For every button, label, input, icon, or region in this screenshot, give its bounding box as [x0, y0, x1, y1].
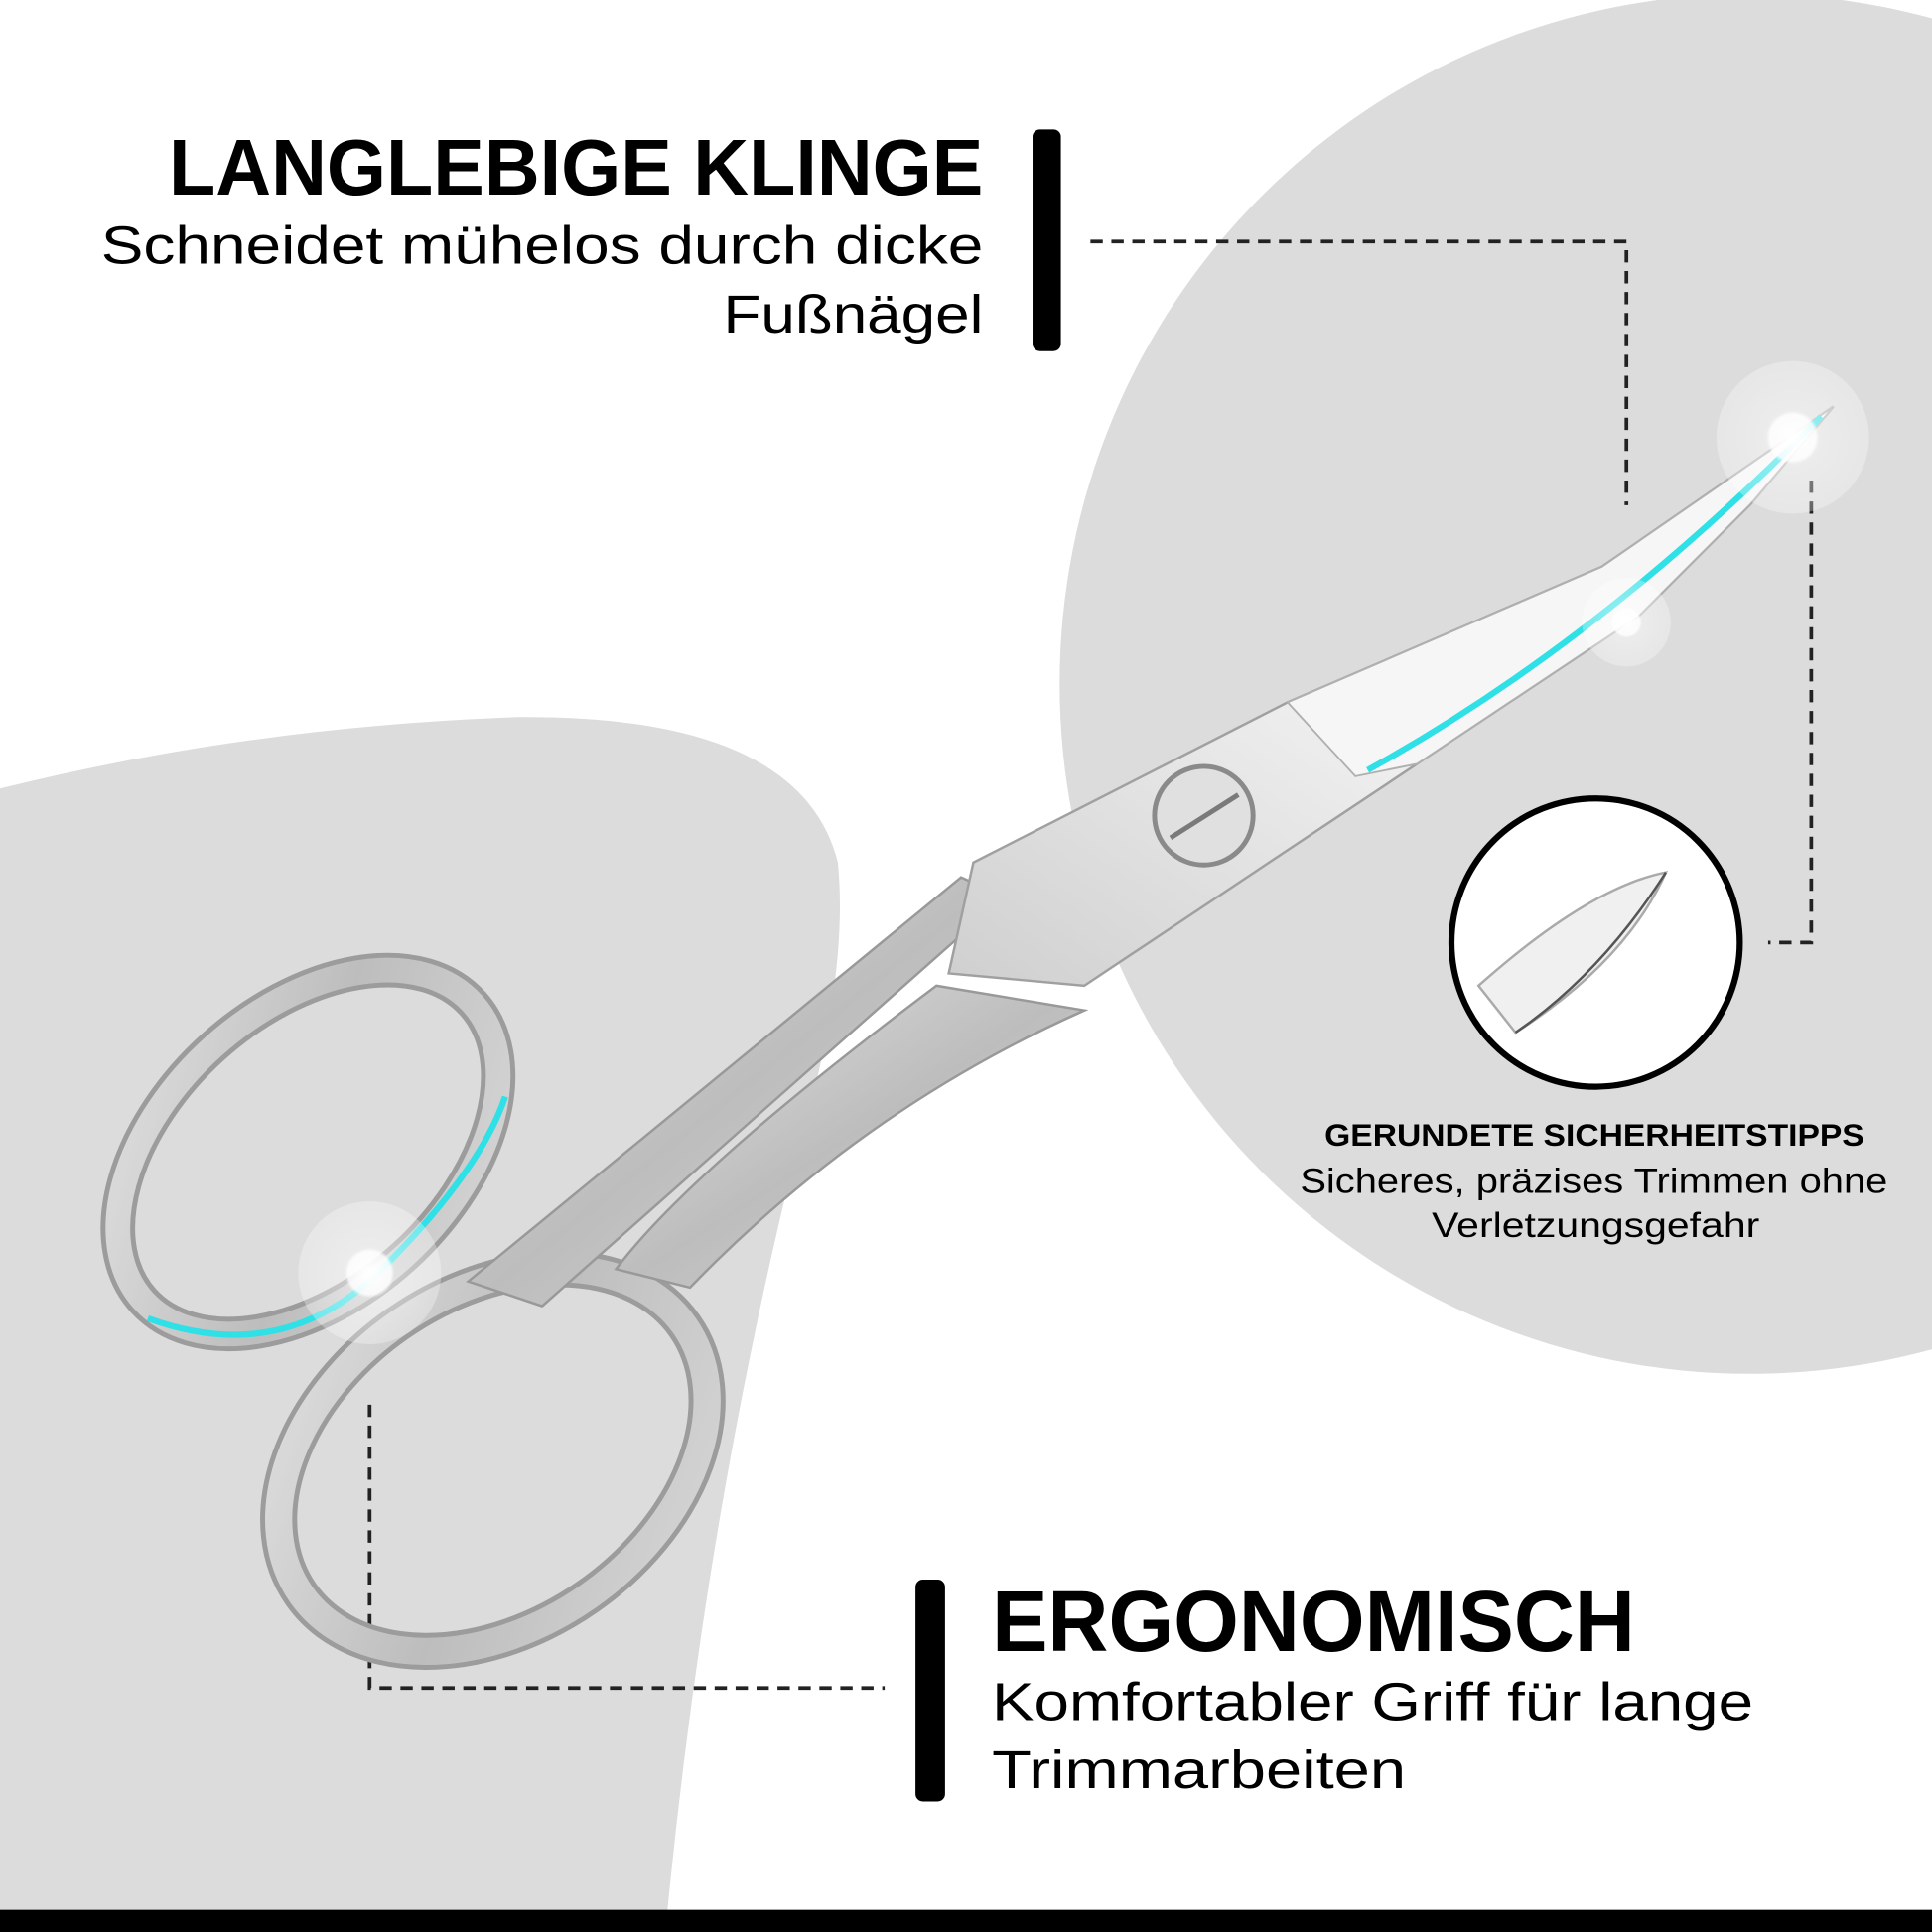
accent bar: ergonomic: [915, 1580, 945, 1801]
shanks: [469, 878, 1004, 1307]
lower handle ring: [206, 1189, 780, 1730]
bottom bar: [0, 1910, 1932, 1932]
background blob: right: [1059, 0, 1932, 1374]
heading block: blade: Schneidet mühelos durch dicke: [101, 217, 983, 276]
dashed connector: tip inset: [1768, 481, 1811, 942]
heading block: ergonomic: [992, 1574, 1753, 1800]
heading block: blade: Fußnägel: [724, 286, 983, 345]
dashed connector: handle: [369, 1405, 885, 1688]
heading block: blade: [101, 123, 983, 345]
cyan edge highlight blade: [1368, 416, 1821, 770]
text block: safety tips: GERUNDETE SICHERHEITSTIPPS: [1324, 1118, 1864, 1153]
heading block: ergonomic: Trimmarbeiten: [992, 1741, 1406, 1800]
heading block: ergonomic: Komfortabler Griff für lange: [992, 1674, 1753, 1732]
inset circle: rounded tip: [1451, 798, 1739, 1087]
text block: safety tips: [1300, 1118, 1887, 1245]
scissors: [49, 361, 1869, 1730]
blade body: [949, 407, 1834, 986]
glow points: [1717, 361, 1869, 514]
pivot screw: [1155, 766, 1253, 865]
upper handle ring: [49, 898, 568, 1406]
text block: safety tips: Sicheres, präzises Trimmen ohne: [1300, 1163, 1887, 1200]
dashed connector: blade: [1090, 241, 1626, 505]
background blob: left: [0, 717, 840, 1932]
accent bar: blade: [1033, 129, 1061, 351]
cyan edge highlight handle: [148, 1097, 505, 1334]
heading block: ergonomic: ERGONOMISCH: [992, 1574, 1635, 1670]
text block: safety tips: Verletzungsgefahr: [1432, 1207, 1759, 1245]
heading block: blade: LANGLEBIGE KLINGE: [169, 123, 983, 211]
